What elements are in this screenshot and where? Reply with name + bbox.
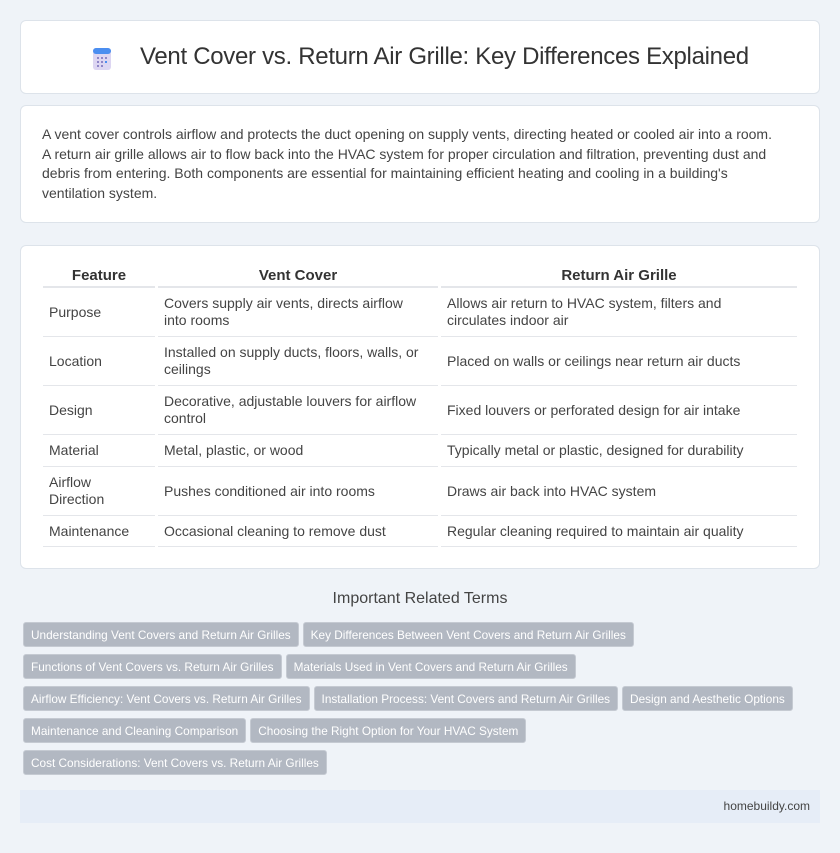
comparison table card: Covers supply air vents, directs airflow (164, 295, 403, 311)
comparison table card (20, 245, 820, 569)
intro text card: ventilation system. (42, 184, 157, 200)
intro text card: A vent cover controls airflow and protects the duct opening on supply vents, directing heated or cooled air into a room. (42, 126, 772, 142)
related terms tags: Understanding Vent Covers and Return Air Grilles (31, 628, 291, 642)
related terms tags: Cost Considerations: Vent Covers vs. Return Air Grilles (31, 756, 319, 770)
comparison table card: Vent Cover (259, 266, 337, 284)
comparison table card: Maintenance (49, 522, 129, 538)
footer: homebuildy.com (724, 799, 810, 813)
comparison table card: Metal, plastic, or wood (164, 442, 303, 458)
comparison table card: Location (49, 352, 102, 368)
comparison table card: Decorative, adjustable louvers for airflow control (164, 393, 416, 426)
related terms tags (23, 622, 793, 775)
related terms tags: Maintenance and Cleaning Comparison (31, 724, 238, 738)
related terms tags: Materials Used in Vent Covers and Return Air Grilles (294, 660, 568, 674)
title: Vent Cover vs. Return Air Grille: Key Differences Explained (140, 43, 749, 70)
comparison table card: Regular cleaning required to maintain air quality (447, 522, 744, 538)
comparison table card: Purpose (49, 304, 101, 320)
comparison table card: Allows air return to HVAC system, filters and (447, 295, 721, 311)
comparison table card: Design (49, 402, 93, 418)
comparison table card: Typically metal or plastic, designed for durability (447, 442, 743, 458)
comparison table card: Fixed louvers or perforated design for air intake (447, 402, 740, 418)
related terms tags: Choosing the Right Option for Your HVAC System (258, 724, 518, 738)
comparison table card: Occasional cleaning to remove dust (164, 522, 386, 538)
related terms tags: Key Differences Between Vent Covers and Return Air Grilles (311, 628, 626, 642)
comparison table card: Return Air Grille (561, 266, 677, 284)
related terms tags: Design and Aesthetic Options (630, 692, 785, 706)
title card (20, 20, 820, 94)
footer (20, 790, 820, 823)
comparison table card: Direction (49, 491, 104, 507)
intro text card (20, 105, 820, 223)
related terms heading: Important Related Terms (333, 590, 507, 607)
comparison table card: Pushes conditioned air into rooms (164, 482, 375, 498)
related terms tags: Functions of Vent Covers vs. Return Air Grilles (31, 660, 274, 674)
related terms tags: Airflow Efficiency: Vent Covers vs. Return Air Grilles (31, 692, 302, 706)
comparison table card: Airflow (49, 474, 91, 490)
comparison table card: Material (49, 442, 99, 458)
comparison table card: Placed on walls or ceilings near return air ducts (447, 352, 740, 368)
comparison table card: into rooms (164, 312, 229, 328)
icon: calendar (93, 48, 111, 70)
comparison table card: Installed on supply ducts, floors, walls, or ceilings (164, 344, 418, 377)
intro text card: debris from entering. Both components are essential for maintaining efficient heating and cooling in a building's (42, 165, 728, 181)
comparison table card: Draws air back into HVAC system (447, 482, 656, 498)
intro text card: A return air grille allows air to flow back into the HVAC system for proper circulation and filtration, preventing dust and (42, 146, 766, 162)
related terms tags: Installation Process: Vent Covers and Return Air Grilles (322, 692, 610, 706)
comparison table card: Feature (72, 266, 126, 284)
comparison table card: circulates indoor air (447, 312, 568, 328)
